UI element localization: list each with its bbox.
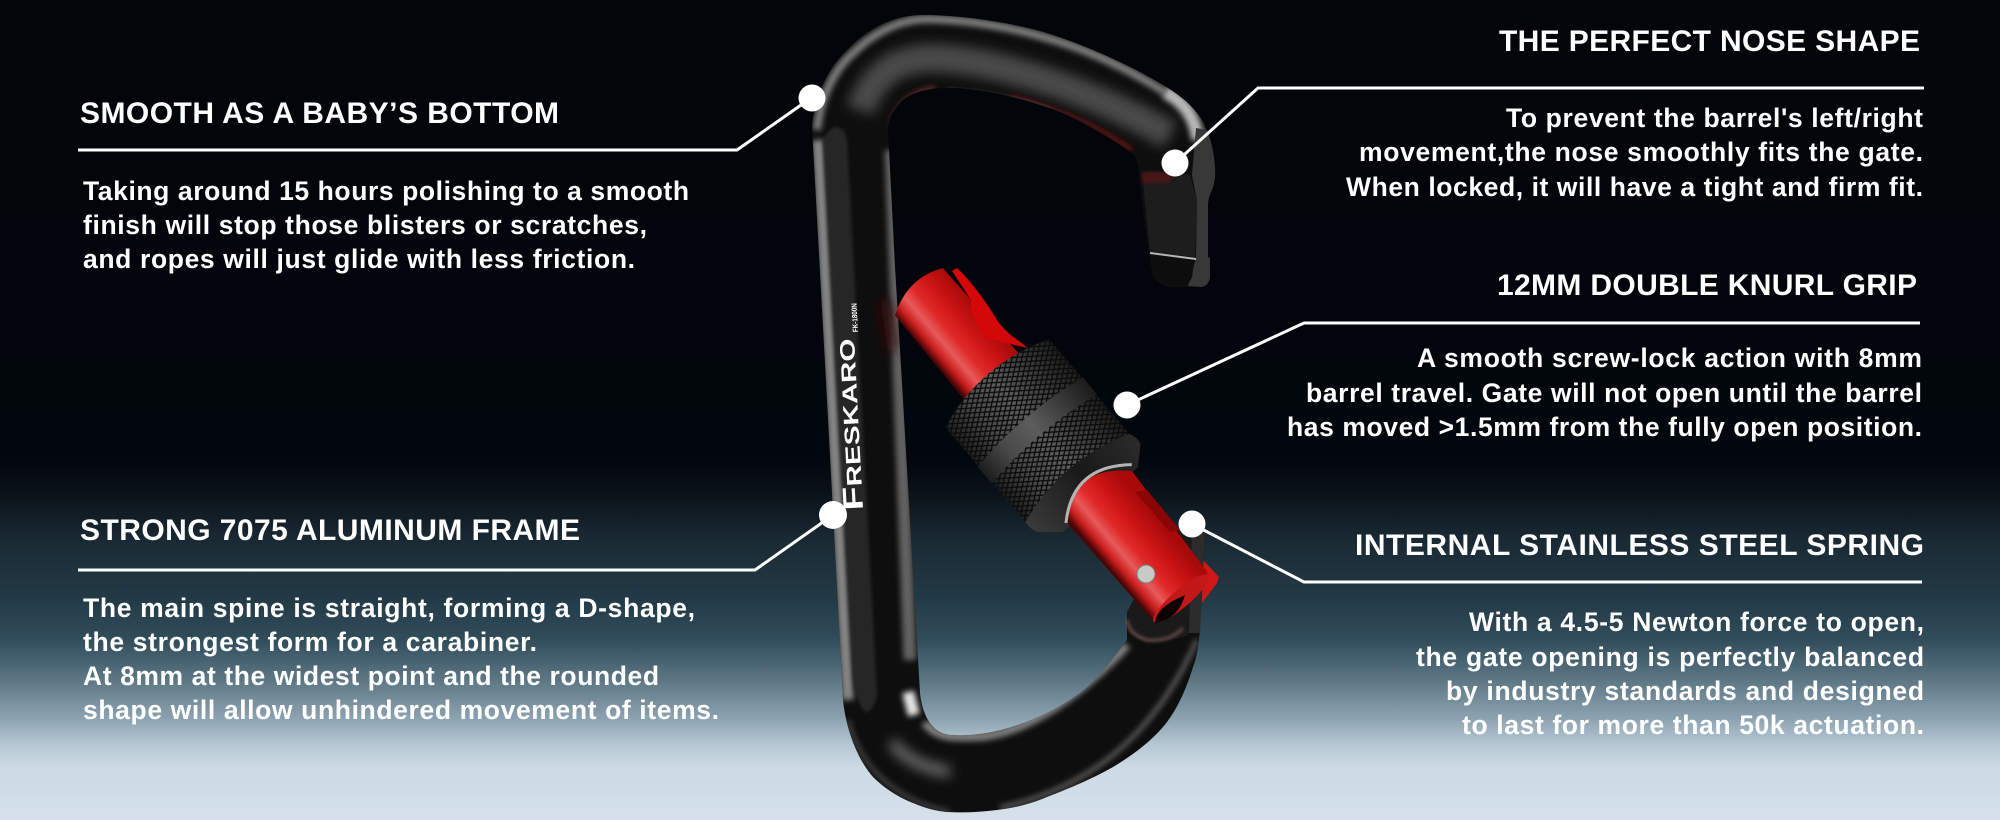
callout: smooth bbox=[78, 84, 826, 274]
body text: to last for more than 50k actuation. bbox=[1462, 710, 1924, 740]
body text: Taking around 15 hours polishing to a smooth bbox=[83, 176, 689, 206]
marker dot bbox=[1162, 150, 1188, 176]
marker dot bbox=[1178, 510, 1206, 538]
body text bbox=[83, 593, 719, 725]
callout: knurl grip bbox=[1114, 269, 1922, 442]
gate lower slot bbox=[1135, 490, 1180, 532]
lower jaw bbox=[1127, 530, 1205, 642]
body text: the strongest form for a carabiner. bbox=[83, 627, 537, 657]
callout: nose shape bbox=[1162, 25, 1924, 202]
leader line bbox=[1127, 323, 1920, 405]
steel pin bbox=[1137, 565, 1155, 583]
lower red sleeve bbox=[1054, 454, 1221, 630]
callout: aluminum frame bbox=[78, 501, 847, 725]
body text: movement,the nose smoothly fits the gate. bbox=[1359, 137, 1923, 167]
carabiner bbox=[812, 15, 1240, 812]
heading: SMOOTH AS A BABY’S BOTTOM bbox=[80, 97, 559, 130]
nose bbox=[1142, 128, 1215, 287]
leader line bbox=[78, 98, 811, 150]
marker dot bbox=[1114, 392, 1140, 418]
marker dot bbox=[798, 84, 826, 112]
body text bbox=[1416, 607, 1924, 740]
body text: has moved >1.5mm from the fully open position. bbox=[1287, 412, 1922, 442]
gate slot tab bbox=[1202, 560, 1219, 603]
leader line bbox=[1192, 524, 1922, 582]
silver ring bbox=[1053, 450, 1133, 523]
heading: THE PERFECT NOSE SHAPE bbox=[1499, 25, 1920, 58]
gate upper slot bbox=[952, 268, 1028, 348]
leader line bbox=[78, 515, 833, 570]
body text: finish will stop those blisters or scratches, bbox=[83, 210, 647, 240]
heading: STRONG 7075 ALUMINUM FRAME bbox=[80, 514, 580, 547]
body text: and ropes will just glide with less friction. bbox=[83, 244, 635, 274]
body text: the gate opening is perfectly balanced bbox=[1416, 642, 1924, 672]
brand logo bbox=[829, 303, 869, 511]
knurled barrel bbox=[936, 328, 1152, 547]
gate upper red sleeve bbox=[886, 261, 1029, 411]
callout: spring bbox=[1178, 510, 1924, 740]
gate barrel and lower sleeve bbox=[936, 328, 1240, 651]
body text: barrel travel. Gate will not open until the barrel bbox=[1306, 378, 1922, 408]
body text: When locked, it will have a tight and firm fit. bbox=[1346, 172, 1923, 202]
body text: shape will allow unhindered movement of items. bbox=[83, 695, 719, 725]
body text bbox=[1346, 103, 1923, 202]
body text: To prevent the barrel's left/right bbox=[1506, 103, 1923, 133]
heading: 12MM DOUBLE KNURL GRIP bbox=[1497, 269, 1917, 302]
brand logo: FRESKARO bbox=[829, 338, 869, 511]
body text bbox=[1287, 343, 1922, 442]
heading: INTERNAL STAINLESS STEEL SPRING bbox=[1355, 529, 1924, 562]
marker dot bbox=[819, 501, 847, 529]
body text bbox=[83, 176, 689, 274]
carabiner frame bbox=[812, 15, 1215, 812]
brand logo: FK-1800N bbox=[849, 303, 860, 332]
body text: At 8mm at the widest point and the rounded bbox=[83, 661, 659, 691]
body text: The main spine is straight, forming a D-shape, bbox=[83, 593, 695, 623]
body text: With a 4.5-5 Newton force to open, bbox=[1469, 607, 1924, 637]
body text: by industry standards and designed bbox=[1446, 676, 1924, 706]
leader line bbox=[1175, 88, 1924, 163]
body text: A smooth screw-lock action with 8mm bbox=[1417, 343, 1922, 373]
